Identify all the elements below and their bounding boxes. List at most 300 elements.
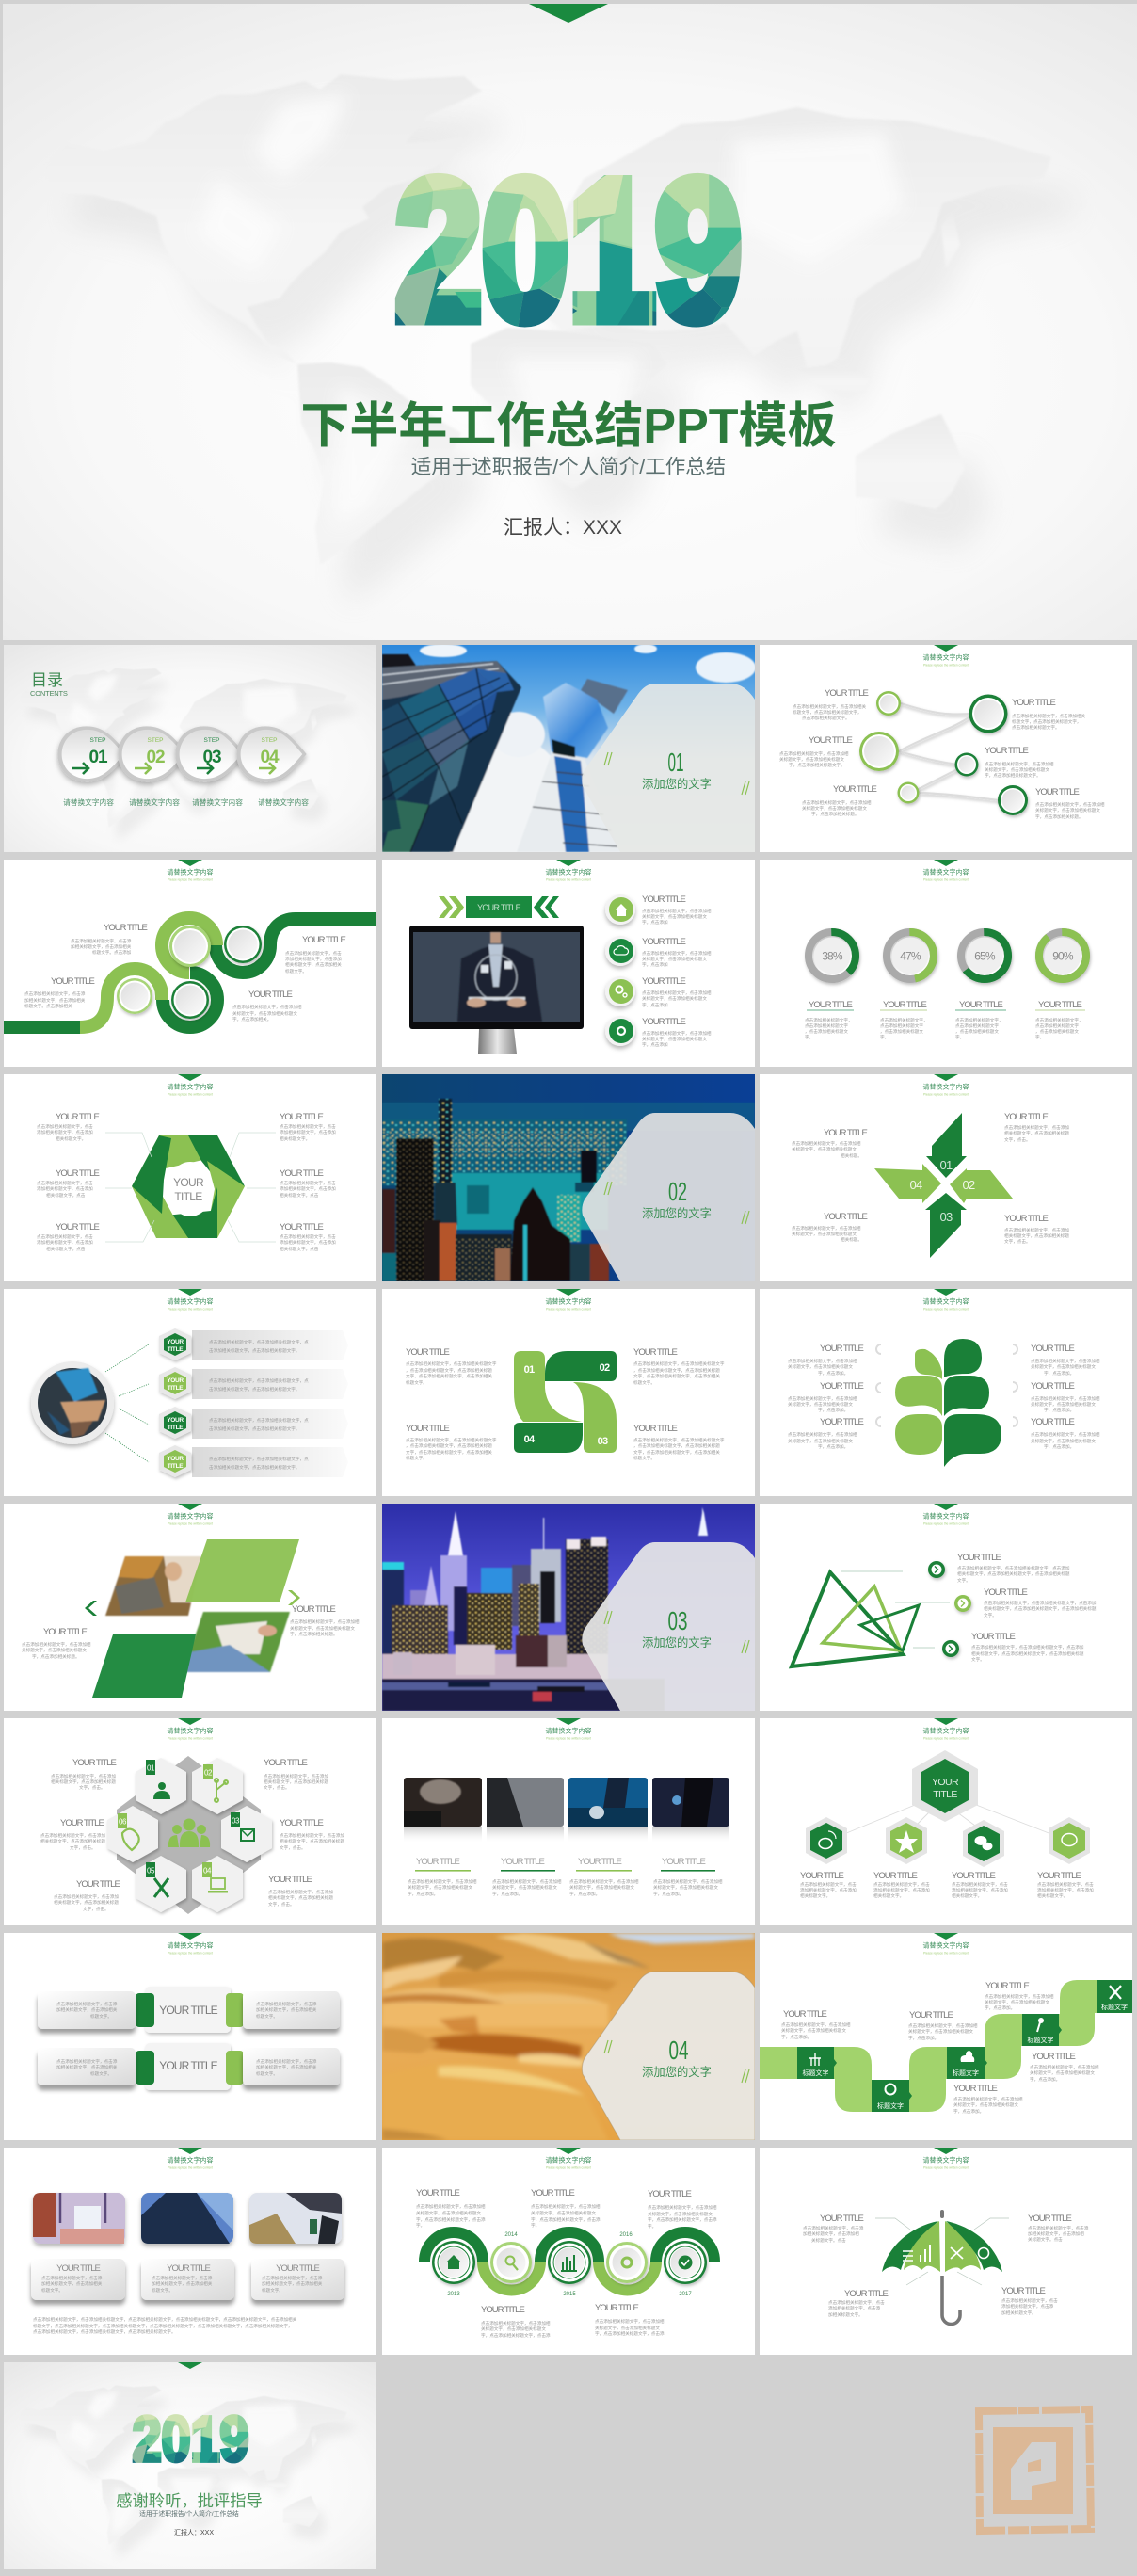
- card row 2: 点击添加相关标题文字，点击添: [56, 2058, 118, 2065]
- text block 2: 相关标题文字，点击添加相关标题文字，点击添加相关标题: [984, 1605, 1097, 1612]
- text block right 3: YOUR TITLE: [1031, 1417, 1074, 1427]
- node 2017 check: [664, 2241, 707, 2284]
- photo: desert dunes: [382, 1933, 755, 2140]
- slide header: Please replace the written content: [168, 1736, 213, 1740]
- panel: four photos slide: [382, 1718, 755, 1925]
- slide header: 请替换文字内容: [168, 1727, 213, 1734]
- text block 2: YOUR TITLE: [531, 2188, 574, 2198]
- column 2 text: 点击添加相关标题文字，点击添加相: [492, 1878, 562, 1885]
- year labels: [447, 2232, 692, 2297]
- icon: cloud: [605, 936, 635, 966]
- step 3: STEP: [204, 737, 219, 744]
- list row 2: [159, 1367, 348, 1399]
- card row 1: 加相关标题文字，点击添加相关: [56, 2006, 118, 2013]
- text block right 2: 关标题文字，点击添加相关标题文: [1031, 1401, 1096, 1408]
- column 3 text: YOUR TITLE: [578, 1857, 621, 1867]
- honeycomb diagram: 05: [147, 1866, 155, 1876]
- panel: contents slide: [4, 645, 376, 852]
- step 2: STEP: [148, 737, 163, 744]
- text block 5: 字，点击添加。: [953, 2108, 984, 2115]
- card 3: [251, 2259, 344, 2300]
- text block 5: [953, 2084, 1023, 2115]
- arrow 04: 04: [909, 1178, 922, 1192]
- slide header: Please replace the written content: [923, 1307, 969, 1311]
- photo 1: [404, 1778, 482, 1843]
- text block 4: [1037, 1871, 1094, 1899]
- text block 4: 点击添加相关标题文字: [1035, 1022, 1079, 1029]
- arrow 03: 03: [939, 1210, 953, 1224]
- text block 2: YOUR TITLE: [984, 1587, 1027, 1598]
- slide header: [168, 1504, 213, 1525]
- slide header: Please replace the written content: [923, 1092, 969, 1096]
- section label panel: [582, 1542, 755, 1711]
- text block bottom left: 点击添加相关标题文字，点击: [828, 2299, 885, 2306]
- center people icon: [168, 1819, 210, 1847]
- text block left 1: 点击添加相关标题文字，点击添加相: [788, 1358, 857, 1364]
- step captions: 请替换文字内容: [258, 797, 309, 807]
- text block 3: 点击添加相关标题文字: [955, 1022, 999, 1029]
- slide header: [168, 1074, 213, 1096]
- card row 1: 标题文字。: [256, 2013, 278, 2020]
- text block 4: 关标题文字，点击添加相关标题文: [1030, 2069, 1095, 2076]
- slide header: Please replace the written content: [923, 1951, 969, 1955]
- panel: wave timeline slide: [382, 2148, 755, 2355]
- text block lower left: YOUR TITLE: [51, 976, 94, 987]
- photo 3: [568, 1778, 648, 1843]
- text block right 2: 添加相关标题文字，点击添加: [280, 1185, 336, 1192]
- text block lower left: [24, 976, 94, 1009]
- list row 4: 击添加相关标题文字，点击添加相关标题文字。: [209, 1464, 299, 1471]
- step 4: 04: [260, 748, 280, 767]
- section label panel: 04: [668, 2036, 689, 2065]
- text block 4: YOUR TITLE: [985, 746, 1028, 756]
- text block top right: ，点击添加相关标题文字，点击添加相关标题: [633, 1367, 720, 1374]
- text block 01: [51, 1758, 116, 1791]
- list row 3: 击添加相关标题文字，点击添加相关标题文字。: [209, 1425, 299, 1432]
- slide header: 请替换文字内容: [922, 653, 969, 661]
- text block 1: 字。: [416, 2222, 424, 2228]
- slide header: 请替换文字内容: [168, 1941, 213, 1949]
- text block bottom left: [828, 2289, 888, 2318]
- text block 03: [280, 1818, 344, 1851]
- step 1: [57, 726, 128, 782]
- section label panel: 02: [668, 1177, 687, 1206]
- text block 1: [800, 1871, 857, 1899]
- icon: chevron 3: [942, 1640, 959, 1657]
- text block 2: 点击添加相关标题文字，点击: [873, 1881, 930, 1888]
- column 2 text: [492, 1857, 562, 1897]
- donut 65%: 65%: [974, 949, 996, 962]
- top hexagon: [912, 1750, 978, 1822]
- text block lower left: 加相关标题文字，点击添加相关: [24, 997, 86, 1004]
- text block 3: 相关标题文字。: [952, 1892, 982, 1899]
- text block 05: 点击添加相关标题文字，点击添加: [54, 1893, 119, 1900]
- list row 4: [159, 1445, 348, 1477]
- text block 02: [264, 1758, 328, 1791]
- text block 5: 关标题文字，点击添加相关标题文: [595, 2325, 660, 2331]
- step 1: STEP: [90, 737, 105, 744]
- card row 1: [38, 1987, 340, 2033]
- card row 2: 加相关标题文字，点击添加相关: [256, 2064, 317, 2070]
- text block 06: 点击添加相关标题文字，点击添加: [40, 1832, 105, 1839]
- text block 4: YOUR TITLE: [1032, 2052, 1075, 2062]
- section label panel: [582, 1972, 755, 2140]
- text block top left: YOUR TITLE: [406, 1347, 449, 1358]
- list row 3: TITLE: [168, 1425, 184, 1431]
- hexagon: message: [1049, 1817, 1090, 1864]
- text block lower left: 点击添加相关标题文字，点击添: [24, 990, 86, 997]
- presenter line: 汇报人：XXX: [504, 517, 622, 539]
- text block 6: 关标题文字，点击添加相关标题文: [1035, 807, 1100, 813]
- text block bottom left: 标题文字。: [406, 1455, 427, 1461]
- text block bottom right: [1001, 2286, 1058, 2316]
- tab 2: 标题文字: [877, 2101, 904, 2110]
- text block right 1: [280, 1112, 336, 1142]
- text block 06: 相关标题文字，点击添加相关标题: [40, 1838, 105, 1844]
- donut 47%: [887, 932, 934, 979]
- text block bottom left: 加相关标题文字。: [828, 2311, 863, 2318]
- card row 2: 标题文字。: [90, 2070, 112, 2077]
- text block 6: YOUR TITLE: [1035, 787, 1079, 797]
- text block right 2: 字，点击添加。: [1044, 1407, 1074, 1413]
- cover title: 下半年工作总结PPT模板: [300, 399, 837, 454]
- slide header: 请替换文字内容: [922, 1512, 969, 1520]
- list row 4: YOUR: [167, 1456, 184, 1462]
- panel: parallelogram photos slide: [4, 1504, 376, 1711]
- text block top left: [792, 1128, 867, 1159]
- hexagon: weibo: [806, 1817, 847, 1864]
- text block right 1: 关标题文字，点击添加相关标题文: [1031, 1363, 1096, 1370]
- text block 3: 点击添加相关标题文字，: [955, 1017, 1003, 1023]
- text block right: 字，点击添加相关标题。: [290, 1631, 338, 1637]
- text block left 1: 关标题文字，点击添加相关标题文: [788, 1363, 853, 1370]
- text block 3: ，点击添加相关标题文: [955, 1028, 999, 1035]
- hexagon swirl diagram: TITLE: [174, 1190, 202, 1203]
- slide header: [168, 1933, 213, 1955]
- slide header: Please replace the written content: [546, 2165, 591, 2169]
- text block 05: YOUR TITLE: [76, 1879, 120, 1890]
- text block 2: 字。: [531, 2222, 539, 2228]
- S shape diagram: 01: [524, 1364, 535, 1376]
- text block left 3: 关标题文字，点击添加相关标题文: [788, 1438, 853, 1444]
- text block left: 字，点击添加相关标题。: [32, 1653, 80, 1660]
- text block 6: 点击添加相关标题文字，点击添加相: [1035, 801, 1105, 808]
- panel: interlocking S slide: [382, 1289, 755, 1496]
- panel: tabbed cards slide: [4, 1933, 376, 2140]
- text block top right: [1028, 2214, 1089, 2243]
- list row 1: [159, 1328, 348, 1360]
- text block 4: 点击添加相关标题文字，点击添加相: [985, 761, 1054, 767]
- text block top left: 点击添加相关标题文字，点击添: [803, 2225, 864, 2231]
- text block left: 关标题文字，点击添加相关标题文: [22, 1647, 87, 1653]
- text block 02: 文字，点击。: [264, 1784, 290, 1791]
- S shape diagram: 03: [598, 1436, 608, 1447]
- text block top right: 关标题文字。点击: [1028, 2236, 1063, 2243]
- text block left 2: 字，点击添加。: [818, 1407, 848, 1413]
- text block lower right: 关标题文字，点击添加相关标题文: [232, 1010, 297, 1017]
- text block 2: 点击添加相关标题文字，: [880, 1017, 928, 1023]
- card 3: 加相关标题文字，点击添加相关: [262, 2280, 323, 2287]
- text block top left: 标题文字。点击添加: [92, 949, 132, 956]
- text block bottom left: YOUR TITLE: [844, 2289, 888, 2299]
- slide header: Please replace the written content: [923, 877, 969, 881]
- donut 38%: [809, 932, 856, 979]
- icon: gear: [605, 1016, 635, 1046]
- text block left 1: [37, 1112, 99, 1142]
- arrow 04: [874, 1164, 941, 1203]
- text block 03: YOUR TITLE: [280, 1818, 323, 1828]
- text block 06: [40, 1818, 105, 1851]
- text block 2: 字。点击添加: [642, 961, 668, 968]
- text block 3: 关标题文字，点击添加相关标题文: [642, 995, 707, 1002]
- text block bottom left: 关标题文字，点击添加相关标题文: [792, 1231, 857, 1237]
- panel: section 02 photo slide: [382, 1074, 755, 1281]
- text block 4: [985, 746, 1054, 779]
- text block bottom right: 点击添加相关标题文字，点击添加相关标题文字: [633, 1437, 725, 1443]
- card 2: [141, 2259, 234, 2300]
- text block 5: 字，点击添加相关标题文字，点击添: [595, 2330, 665, 2337]
- text block top right: 文字，点击。: [1004, 1136, 1031, 1143]
- text block 1: 关标题文字，点击添加相关标题文: [416, 2210, 481, 2216]
- text block 2: 点击添加相关标题文字，点击添加相关标题文字，点击添加: [984, 1600, 1097, 1606]
- text block 2: 点击添加相关标题文字，点击添加相: [642, 950, 712, 957]
- list row 3: [159, 1407, 348, 1439]
- slide header: 请替换文字内容: [922, 2156, 969, 2164]
- text block 1: 点击添加相关标题文字，点击: [800, 1881, 857, 1888]
- text block right 3: 点击添加相关标题文字，点击添加相: [1031, 1431, 1100, 1438]
- text block 6: [1035, 787, 1105, 820]
- slide header: [922, 1933, 969, 1955]
- photo: writing on notebook: [183, 1612, 290, 1672]
- tab 5: 标题文字: [1101, 2003, 1128, 2011]
- text block 5: 关标题文字，点击添加相关标题文: [802, 805, 867, 812]
- card 2: 加相关标题文字，点击添加相关: [152, 2280, 213, 2287]
- text block bottom right: 文字，点击。: [1004, 1238, 1031, 1245]
- text block 3: [971, 1632, 1084, 1663]
- text block 2: 字，点击添加相关标题文字，点击添: [531, 2216, 601, 2223]
- text block 2: 点击添加相关标题文字: [880, 1022, 923, 1029]
- text block 3: YOUR TITLE: [648, 2189, 691, 2199]
- step captions: 请替换文字内容: [129, 797, 180, 807]
- card 1: 加相关标题文字，点击添加相关: [41, 2280, 103, 2287]
- list row 2: TITLE: [168, 1385, 184, 1392]
- text block 4: YOUR TITLE: [1038, 1000, 1081, 1010]
- text block right 1: 字，点击添加。: [1044, 1370, 1074, 1377]
- text block top left: 加相关标题文字，点击添加相: [803, 2230, 859, 2237]
- text block 01: 文字，点击。: [79, 1784, 105, 1791]
- text block top left: ，点击添加相关标题文字，点击添加相关标题: [406, 1367, 492, 1374]
- text block bottom right: 相关标题文字，点击添加相关标题: [1004, 1232, 1069, 1239]
- slide header: Please replace the written content: [168, 877, 213, 881]
- slide header: Please replace the written content: [923, 1736, 969, 1740]
- text block bottom right: 添加相关标题文字，点击添: [1001, 2303, 1054, 2310]
- text block left: [22, 1627, 91, 1660]
- step 3: [175, 726, 246, 782]
- tab 1: [797, 2047, 837, 2079]
- list row 4: TITLE: [168, 1463, 184, 1470]
- arrow 02: [950, 1168, 1013, 1203]
- arrow 02: 02: [962, 1178, 975, 1192]
- step 2: 02: [146, 748, 165, 767]
- text block 1: [793, 688, 868, 721]
- text block bottom left: [792, 1212, 867, 1243]
- year labels: 2015: [563, 2292, 576, 2297]
- text block 02: YOUR TITLE: [264, 1758, 307, 1768]
- text block lower right: [232, 990, 302, 1022]
- text block 3: 字。点击添加: [642, 1002, 668, 1008]
- column 1 text: [408, 1857, 477, 1897]
- section label panel: 添加您的文字: [642, 1206, 712, 1220]
- text block 1: [781, 2009, 851, 2040]
- text block 3: [648, 2189, 717, 2229]
- text block 3: [779, 735, 852, 768]
- slide header: 请替换文字内容: [546, 1297, 591, 1305]
- ribbon diagram: [4, 918, 376, 1027]
- text block 1: 添加相关标题文字，点击添加: [800, 1887, 857, 1893]
- panel: closing slide: [4, 2362, 376, 2569]
- card row 2: 标题文字。: [256, 2070, 278, 2077]
- slide header: Please replace the written content: [923, 2165, 969, 2169]
- text block 3: [642, 976, 712, 1008]
- text block right 1: YOUR TITLE: [1031, 1344, 1074, 1354]
- text block 02: 相关标题文字，点击添加相关标题: [264, 1779, 328, 1785]
- step 4: [236, 726, 307, 782]
- node 2014 search: [490, 2242, 532, 2283]
- text block 5: 点击添加相关标题文字，点击添加相: [595, 2318, 665, 2325]
- text block 3: 关标题文字，点击添加相关标题文: [779, 756, 844, 763]
- text block 2: YOUR TITLE: [909, 2010, 953, 2021]
- text block right 2: 点击添加相关标题文字，点击添加相: [1031, 1395, 1100, 1402]
- text block 4: [642, 1017, 712, 1048]
- text block right: [285, 935, 345, 974]
- honeycomb diagram: 01: [147, 1764, 155, 1772]
- text block 03: 点击添加相关标题文字，点击添加: [280, 1832, 344, 1839]
- card row 2: 加相关标题文字，点击添加相关: [56, 2064, 118, 2070]
- text block top left: [803, 2214, 864, 2244]
- card row 1: YOUR TITLE: [159, 2004, 218, 2017]
- text block 2: [873, 1871, 930, 1899]
- text block bottom right: YOUR TITLE: [1001, 2286, 1045, 2296]
- node 5: [898, 781, 919, 804]
- text block bottom left: [406, 1424, 497, 1461]
- text block 2: 字。: [880, 1034, 889, 1039]
- triangles diagram: [792, 1572, 919, 1666]
- photo: blue building: [141, 2193, 233, 2244]
- text block top left: 关标题文字，点击添加相关标题文: [792, 1146, 857, 1152]
- text block 3: 字，点击添加相关标题文字。: [789, 762, 845, 768]
- slide header: [546, 860, 591, 881]
- text block top left: YOUR TITLE: [820, 2214, 863, 2224]
- text block 5: YOUR TITLE: [595, 2303, 638, 2313]
- text block 4: YOUR TITLE: [1037, 1871, 1081, 1881]
- card row 2: YOUR TITLE: [159, 2059, 218, 2072]
- text block 3: 点击添加相关标题文字，点击添加相: [779, 750, 849, 757]
- closing subtitle: 适用于述职报告/个人简介/工作总结: [139, 2509, 239, 2518]
- panel: cover slide: [3, 4, 1137, 640]
- text block 2: [1012, 698, 1086, 731]
- text block right 2: 点击添加相关标题文字，点击: [280, 1180, 336, 1186]
- text block right: 点击添加相关标题文字，点击添加相: [290, 1618, 360, 1625]
- text block right 3: 字，点击添加。: [1044, 1443, 1074, 1450]
- contents heading: [30, 671, 68, 698]
- text block 1: 点击添加相关标题文字，点击添加相: [781, 2021, 851, 2028]
- contents heading: 目录: [31, 671, 63, 689]
- text block 4: 字，点击添加。: [1030, 2076, 1060, 2083]
- hexagon: qzone: [886, 1817, 927, 1864]
- text block right 3: 点击添加相关标题文字，点击: [280, 1233, 336, 1240]
- panel: network nodes slide: [760, 645, 1132, 852]
- slide header: [922, 2148, 969, 2169]
- hexagon: wechat: [963, 1820, 1004, 1867]
- card 1: 标题文字。: [41, 2287, 63, 2294]
- panel: four arrows slide: [760, 1074, 1132, 1281]
- text block 1: YOUR TITLE: [809, 1000, 852, 1010]
- text block bottom right: 文字，点击添加相关标题文字，点击添加相关: [633, 1449, 720, 1456]
- text block 1: 字，点击添加。: [781, 2034, 811, 2040]
- text block top right: 标题文字。: [633, 1379, 655, 1386]
- text block bottom right: 标题文字。: [633, 1455, 655, 1461]
- text block top left: 标题文字。: [406, 1379, 427, 1386]
- text block left 2: 相关标题文字。点击: [46, 1192, 86, 1199]
- panel: umbrella slide: [760, 2148, 1132, 2355]
- panel: section 03 photo slide: [382, 1504, 755, 1711]
- text block right 3: [280, 1222, 336, 1252]
- card 1: YOUR TITLE: [56, 2263, 101, 2274]
- text block 2: YOUR TITLE: [642, 937, 685, 947]
- column 1 text: 字，点击添加。: [408, 1891, 438, 1897]
- text block bottom right: [633, 1424, 725, 1461]
- text block top left: YOUR TITLE: [824, 1128, 867, 1138]
- text block bottom left: 文字，点击添加相关标题文字，点击添加相关: [406, 1449, 492, 1456]
- slide header: Please replace the written content: [168, 1307, 213, 1311]
- big year 2019: 2019: [395, 139, 742, 361]
- text block top right: [633, 1347, 725, 1386]
- node 2015 chart: [548, 2241, 591, 2284]
- text block 5: 关标题文字，点击添加相关标题文: [953, 2101, 1018, 2108]
- card 1: [31, 2259, 125, 2300]
- connector lines: [105, 1133, 276, 1242]
- text block left 1: YOUR TITLE: [820, 1344, 863, 1354]
- arrow 03: [925, 1193, 967, 1258]
- step 2: [118, 726, 188, 782]
- node 2: [969, 695, 1007, 733]
- node 1: [876, 691, 901, 716]
- text block 05: 相关标题文字，点击添加相关标题: [54, 1899, 119, 1906]
- connector lines: [899, 703, 1000, 800]
- tab 4: [1022, 2014, 1062, 2046]
- text block 4: [1030, 2052, 1099, 2083]
- column 1 text: 关标题文字，点击添加相关标题文: [408, 1884, 472, 1891]
- list row 2: 点击添加相关标题文字，点击添加相关标题文字，点: [209, 1377, 309, 1384]
- honeycomb diagram: [107, 1756, 272, 1914]
- text block right 2: YOUR TITLE: [1031, 1381, 1074, 1392]
- text block 05: 文字，点击。: [83, 1906, 109, 1912]
- text block top left: 点击添加相关标题文字，点击添加相关标题文字: [406, 1360, 497, 1367]
- pointer lines: [841, 1571, 950, 1648]
- slide header: 请替换文字内容: [168, 868, 213, 876]
- tab 5: [1097, 1980, 1132, 2013]
- panel: honeycomb slide: [4, 1718, 376, 1925]
- text block 4: 点击添加相关标题文字，点击添加相: [642, 1030, 712, 1037]
- text block right 2: 相关标题文字。点击: [280, 1192, 319, 1199]
- card row 1: 点击添加相关标题文字，点击添: [56, 2001, 118, 2007]
- text block top left: [406, 1347, 497, 1386]
- panel: hexagon swirl slide: [4, 1074, 376, 1281]
- text block right: 相关标题文字，点击添加相关: [285, 961, 342, 968]
- slide header: 请替换文字内容: [922, 1941, 969, 1949]
- text block 1: 点击添加相关标题文字。: [802, 715, 850, 721]
- hexagon swirl diagram: YOUR: [173, 1176, 204, 1189]
